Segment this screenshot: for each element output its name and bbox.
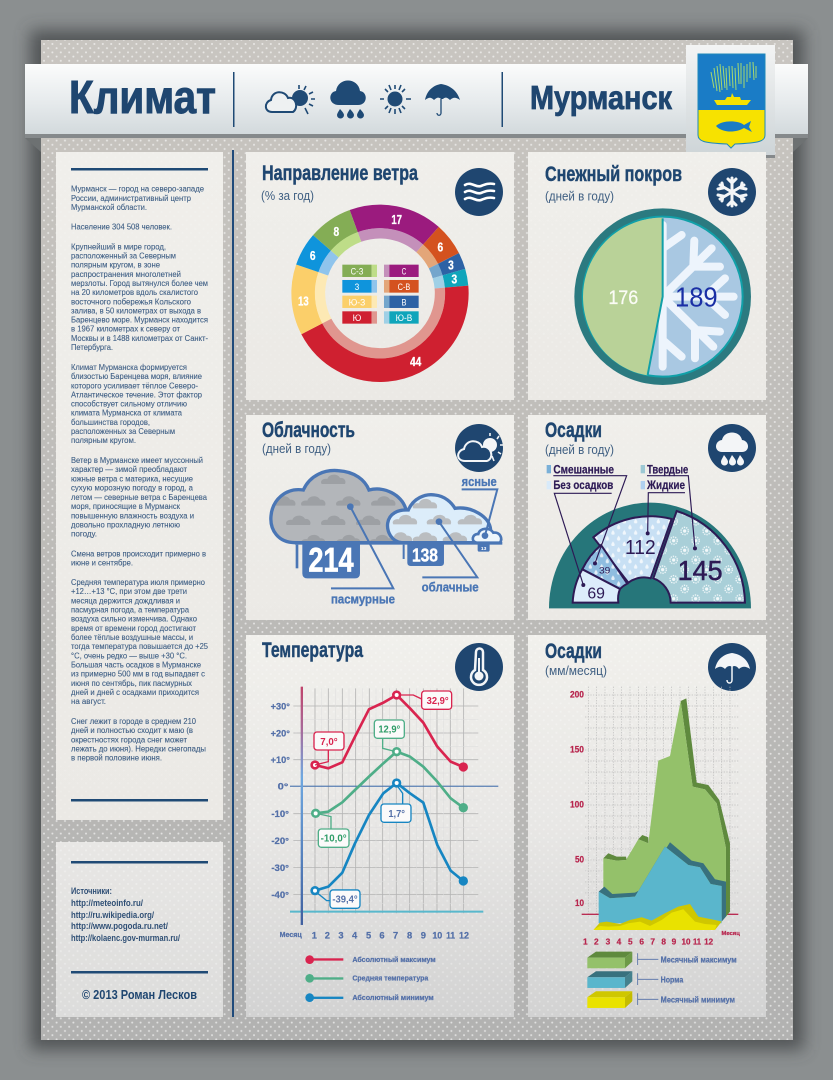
legend: monthly maximum [587, 952, 737, 968]
month labels: 1 [583, 936, 588, 946]
donut chart [272, 185, 488, 402]
month labels: 10 [681, 936, 691, 946]
article text: довольно прохладную летнюю [71, 519, 180, 529]
article text: Большая часть осадков в Мурманске [71, 660, 201, 670]
callout: -39,4: -39,4° [332, 895, 358, 906]
fish [716, 121, 752, 132]
segment: snow days 145 [653, 511, 745, 603]
legend [305, 955, 436, 1002]
area: norm [599, 842, 726, 923]
heading: Осадки [545, 419, 602, 442]
icon: sun [380, 85, 411, 114]
axis values: 10 [575, 898, 584, 908]
shield [698, 54, 765, 148]
legend: monthly minimum: Месячный минимум [661, 994, 735, 1004]
callout: -10,0 [318, 814, 349, 847]
article text: время от времени город достигают [71, 623, 196, 633]
subheading: (дней в году) [545, 190, 614, 204]
area chart [570, 687, 740, 1008]
article text: России, административный центр [71, 193, 191, 203]
axis labels: -20° [271, 836, 289, 846]
segment: rain days 112 [593, 516, 672, 583]
article text: Смена ветров происходит примерно в [71, 548, 206, 558]
donut chart: 17 [391, 213, 402, 227]
article text: Крупнейший в мире город, [71, 241, 166, 251]
month labels: 11 [693, 936, 701, 946]
article text: южные ветра с материка, несущие [71, 473, 193, 483]
donut chart: 44 [410, 355, 421, 369]
donut chart: 8 [333, 225, 339, 239]
panel: precipitation amount [528, 635, 766, 1017]
axis labels: -10° [271, 809, 289, 819]
value bar: 214: 214 [308, 542, 354, 580]
article text: Население 304 508 человек. [71, 222, 172, 232]
legend: Твердые [647, 463, 689, 476]
month labels: 5 [628, 936, 633, 946]
sources list: http://kolaenc.gov-murman.ru/ [71, 933, 180, 943]
article text: °C, очень редко — выше +30 °C. [71, 650, 187, 660]
legend: Абсолютный максимум [352, 955, 436, 964]
segment: mixed days 39 [582, 545, 627, 589]
segment values: 39 [599, 565, 610, 575]
line: average [312, 748, 467, 817]
article text: расположенный за Северным [71, 250, 176, 260]
article text: способствует сильному отличию [71, 399, 187, 409]
callout: clear [462, 475, 497, 539]
semi-circle chart [547, 463, 751, 608]
legend: monthly minimum [587, 991, 735, 1008]
month labels: 1 [312, 930, 317, 940]
leader lines [553, 476, 695, 585]
article text: повышенную влажность воздуха и [71, 510, 194, 520]
article text: климата Мурманска от климата [71, 408, 182, 418]
value bar: 13: 13 [481, 546, 487, 552]
article text: погоду. [71, 529, 97, 539]
segment: dry days 69 [573, 569, 620, 603]
callout: cloudy [422, 518, 479, 595]
month labels: 8 [407, 930, 412, 940]
article text: расположенных за Северным [71, 426, 175, 436]
article text: пасмурная погода, а температура [71, 604, 189, 614]
donut legend: Ю [353, 313, 361, 323]
callout: 1,7 [381, 786, 411, 822]
month labels: 12 [459, 930, 469, 940]
article text: Мурманской области. [71, 202, 147, 212]
heading: Снежный покров [545, 163, 682, 186]
month labels [280, 930, 469, 940]
article text: лежать до июня). Нередки снегопады [71, 744, 206, 754]
city name: Мурманск [530, 79, 672, 116]
callout: overcast: пасмурные [331, 592, 395, 606]
month labels: 6 [639, 936, 644, 946]
icon: thermometer [455, 643, 503, 691]
panel: snow cover [528, 152, 766, 400]
small cloud: clear [473, 529, 501, 543]
month labels: 9 [672, 936, 677, 946]
article text: окрестностях города снег может [71, 734, 187, 744]
article text: полярным кругом, в зоне [71, 260, 160, 270]
icon: rain cloud [330, 80, 366, 118]
axis values: 100 [570, 799, 584, 809]
axis labels: +20° [271, 728, 290, 738]
article text: Баренцево море. Мурманск находится [71, 315, 208, 325]
heading: Облачность [262, 419, 355, 442]
legend: norm: Норма [661, 974, 684, 984]
axis values [570, 690, 584, 908]
legend [547, 463, 689, 492]
article text: близостью Баренцева моря, влияние [71, 371, 202, 381]
article text: Атлантическое течение. Этот фактор [71, 389, 202, 399]
donut legend: С-З [351, 266, 364, 276]
icon: sun and cloud [455, 424, 503, 472]
axis labels: -40° [271, 890, 289, 900]
icon: cloud and sun [266, 85, 315, 114]
sources list [71, 886, 180, 943]
legend: Средняя температура [352, 974, 429, 983]
line: absolute maximum [312, 692, 467, 770]
month labels: Месяц [280, 932, 302, 939]
copyright: © 2013 Роман Лесков [82, 988, 197, 1002]
article text: Ветер в Мурманске имеет муссонный [71, 455, 203, 465]
month labels: 7 [650, 936, 655, 946]
article text: дней и дней с осадками приходится [71, 687, 199, 697]
donut legend: С-В [398, 282, 410, 292]
subheading: (мм/месяц) [545, 664, 607, 678]
article text: сухую морозную погоду в город, а [71, 483, 193, 493]
article text: полярным кругом. [71, 435, 136, 445]
article text: из примерно 500 мм в год выпадает с [71, 669, 206, 679]
article text: Петербурга. [71, 342, 113, 352]
article text: которого усиливает тёплое Северо- [71, 380, 198, 390]
month labels [583, 931, 740, 946]
title: Климат [69, 71, 216, 123]
segment values [587, 537, 723, 602]
legend: norm [587, 971, 684, 988]
donut legend: В [401, 297, 406, 307]
ship [714, 93, 751, 105]
callout: 7,0: 7,0° [320, 737, 338, 748]
sources list: http://www.pogoda.ru.net/ [71, 921, 168, 931]
article text: характер — зимой преобладают [71, 464, 187, 474]
article text: мерзлоты. Город вытянулся более чем [71, 278, 208, 288]
callout: 12,9: 12,9° [378, 725, 400, 736]
article text: +12…+13 °C, при этом две трети [71, 586, 187, 596]
donut legend: Ю-З [349, 297, 366, 307]
donut legend: З [355, 282, 360, 292]
callout: 32,9 [400, 691, 452, 709]
legend: Без осадков [553, 479, 613, 492]
vertical divider [232, 150, 234, 1017]
subheading: (дней в году) [262, 442, 331, 456]
line chart [271, 687, 498, 1002]
article text: восточного побережья Кольского [71, 296, 191, 306]
axis labels: +30° [271, 701, 290, 711]
article text: месяца держится дождливая и [71, 595, 180, 605]
panel: sources and credit [56, 842, 223, 1017]
article text: более тёплые воздушные массы, и [71, 632, 193, 642]
legend: Абсолютный минимум [352, 993, 434, 1002]
area: monthly minimum [593, 904, 722, 930]
article text: Климат Мурманска формируется [71, 362, 187, 372]
callout: cloudy: облачные [422, 581, 479, 595]
value: 189: 189 [675, 282, 718, 313]
month labels: 8 [661, 936, 666, 946]
month labels: 6 [379, 930, 385, 940]
donut chart: 6 [437, 240, 443, 254]
month labels: 7 [393, 930, 398, 940]
value bar: 13 [478, 543, 490, 552]
month labels: 2 [325, 930, 330, 940]
donut chart: 3 [451, 273, 457, 287]
panel: temperature [246, 635, 514, 1017]
heading: Направление ветра [262, 162, 418, 185]
month labels: 5 [366, 930, 371, 940]
icon: wind [455, 168, 503, 216]
callout: -39,4 [318, 890, 360, 908]
icon: umbrella [425, 84, 460, 115]
callout: 1,7: 1,7° [388, 809, 405, 820]
donut legend [342, 265, 419, 324]
header ribbon [25, 45, 808, 158]
article text: в первой половине июня. [71, 753, 162, 763]
axis labels: 0° [278, 782, 289, 792]
icon: snowflake [708, 168, 756, 216]
article text [71, 184, 208, 763]
callout: 32,9: 32,9° [427, 696, 449, 707]
article text: Мурманск — город на северо-западе [71, 184, 204, 194]
subheading: (дней в году) [545, 443, 614, 457]
legend: Смешанные [553, 463, 614, 476]
article text: залива, в 50 километрах от выхода в [71, 305, 201, 315]
donut chart: 3 [448, 258, 454, 272]
legend: monthly maximum: Месячный максимум [661, 954, 737, 964]
axis labels: +10° [271, 755, 290, 765]
article text: тогда температура повышается до +25 [71, 641, 208, 651]
subheading: (% за год) [261, 189, 314, 203]
area: monthly maximum [603, 698, 730, 917]
axis values: 50 [575, 854, 584, 864]
donut chart: 6 [310, 249, 315, 263]
callout: clear: ясные [462, 475, 497, 489]
callout: -10,0: -10,0° [321, 834, 347, 845]
month labels: 2 [594, 936, 599, 946]
line: absolute minimum [312, 780, 467, 894]
article text: Москвы и в 1488 километрах от Санкт- [71, 333, 208, 343]
value bar: 138 [403, 543, 444, 566]
segment values: 69 [587, 585, 605, 602]
month labels: Месяц [721, 931, 740, 937]
month labels: 4 [617, 936, 622, 946]
article text: июне и сентябре. [71, 558, 133, 568]
sources list: Источники: [71, 886, 112, 896]
article text: Снег лежит в городе в среднем 210 [71, 716, 196, 726]
clouds chart [271, 470, 502, 606]
axis values: 150 [570, 744, 584, 754]
month labels: 10 [432, 930, 442, 940]
month labels: 9 [421, 930, 426, 940]
donut legend: Ю-В [396, 313, 412, 323]
pie chart [574, 208, 751, 385]
month labels: 3 [338, 930, 344, 940]
callout: 12,9 [374, 720, 404, 751]
donut legend: С [402, 266, 406, 276]
article text: моря, приносящие в Мурманск [71, 501, 180, 511]
panel: precipitation days [528, 415, 766, 620]
article text: в 1967 километрах к северу от [71, 324, 180, 334]
article text: дней и полностью сходит к маю (в [71, 725, 193, 735]
month labels: 12 [704, 936, 714, 946]
aurora [711, 62, 756, 92]
article text: на 20 километров вдоль скалистого [71, 287, 198, 297]
month labels: 4 [352, 930, 358, 940]
axis values: 200 [570, 690, 584, 700]
heading: Температура [262, 639, 363, 662]
article text: распространения многолетней [71, 269, 181, 279]
sources list: http://meteoinfo.ru/ [71, 898, 143, 908]
article text: Средняя температура июля примерно [71, 577, 205, 587]
big cloud: overcast [271, 470, 407, 544]
segment values: 145 [678, 555, 723, 586]
legend: Жидкие [646, 479, 685, 492]
donut chart: 13 [298, 295, 309, 309]
segment values: 112 [625, 537, 656, 559]
value: 176: 176 [608, 288, 638, 309]
panel: intro text [56, 152, 223, 820]
icon: umbrella [708, 643, 756, 691]
coat of arms panel [686, 45, 775, 158]
article text: большинства городов, [71, 417, 150, 427]
callout: 7,0 [314, 732, 344, 765]
article text: на август. [71, 696, 106, 706]
article text: июня по сентябрь, пик пасмурных [71, 678, 193, 688]
axis labels [271, 701, 290, 900]
value bar: 138: 138 [412, 545, 438, 566]
month labels: 11 [446, 930, 455, 940]
article text: воздуха сильно изменчива. Однако [71, 614, 197, 624]
panel: wind direction [246, 152, 514, 402]
month labels: 3 [606, 936, 611, 946]
heading: Осадки [545, 640, 602, 663]
callout: overcast [331, 503, 395, 606]
middle cloud: cloudy [388, 495, 491, 543]
panel: cloudiness [246, 415, 514, 620]
axis labels: -30° [271, 863, 289, 873]
icon: rain cloud [708, 424, 756, 472]
article text: летом — северные ветра с Баренцева [71, 492, 207, 502]
sources list: http://ru.wikipedia.org/ [71, 910, 154, 920]
